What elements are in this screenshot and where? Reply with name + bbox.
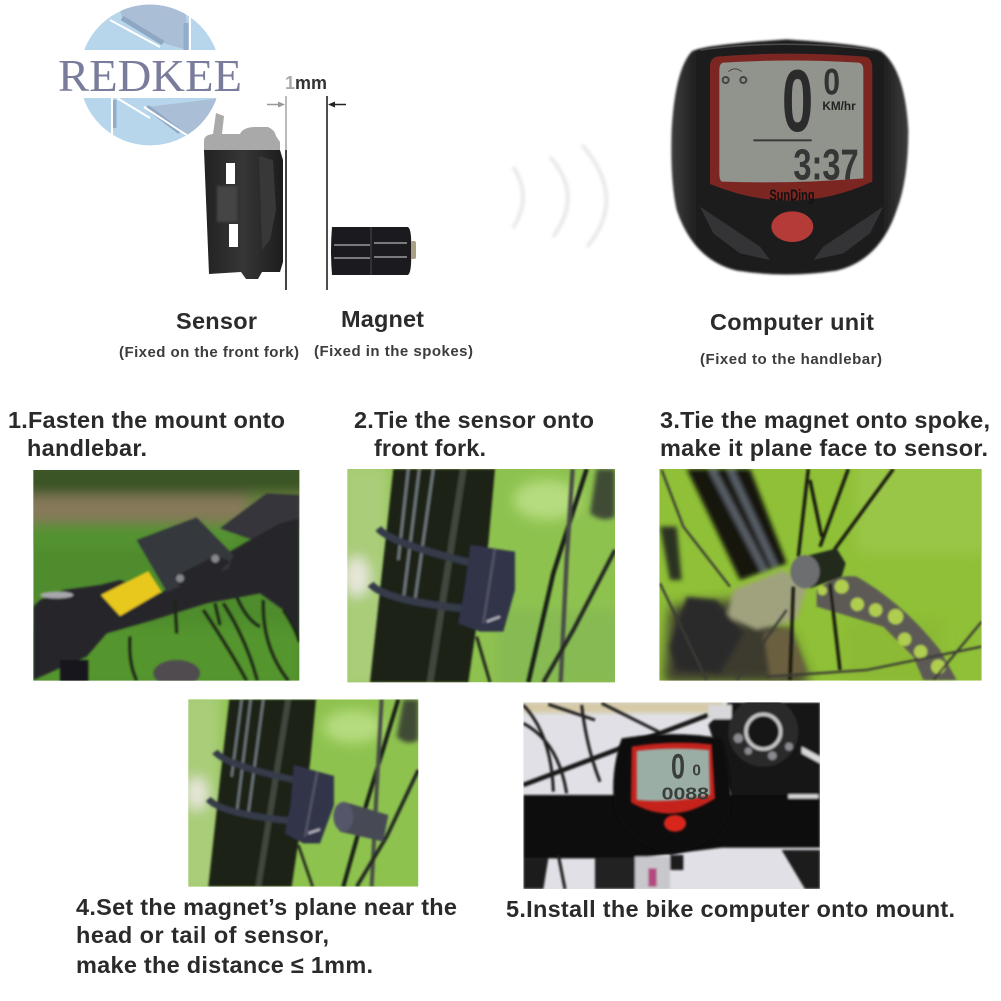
side buttons xyxy=(700,207,770,260)
step 4 heading: 4.Set the magnet’s plane near the xyxy=(76,894,457,920)
computer unit xyxy=(671,39,908,274)
unit body xyxy=(671,39,908,274)
photo: magnet on spoke xyxy=(659,463,987,683)
logo: REDKEE xyxy=(58,0,242,150)
step 2 heading: 2.Tie the sensor onto xyxy=(354,407,594,433)
logo aperture xyxy=(80,4,219,146)
sensor label: Sensor xyxy=(176,308,257,334)
mounted unit red button xyxy=(664,815,686,832)
computer unit placement note: (Fixed to the handlebar) xyxy=(700,351,882,368)
step 1 heading: handlebar. xyxy=(27,435,147,461)
red mode button xyxy=(771,211,813,242)
step 5 heading: 5.Install the bike computer onto mount. xyxy=(506,896,955,922)
step 4 heading: make the distance ≤ 1mm. xyxy=(76,952,373,978)
step 3 heading: 3.Tie the magnet onto spoke, xyxy=(660,407,990,433)
gap label: 1mm: 1mm xyxy=(285,73,327,93)
photo: sensor on fork xyxy=(340,463,620,687)
sensor xyxy=(204,113,283,279)
mounted unit speed readout: 0 xyxy=(671,747,685,786)
photo: computer on mount xyxy=(523,697,820,889)
speed decimal digit: 0 xyxy=(823,63,840,103)
step 4 heading: head or tail of sensor, xyxy=(76,922,329,948)
photo: magnet near sensor xyxy=(180,693,418,893)
speed unit: KM/hr xyxy=(822,99,856,113)
mounted unit bezel xyxy=(631,743,715,814)
step 1 heading: 1.Fasten the mount onto xyxy=(8,407,285,433)
LCD icons xyxy=(723,69,746,83)
mounted unit small digit: 0 xyxy=(692,763,701,780)
LCD screen xyxy=(719,60,863,182)
photo: mount on handlebar xyxy=(33,470,300,681)
logo wordmark: REDKEE xyxy=(58,50,242,101)
magnet xyxy=(331,227,416,275)
brand: SunDing xyxy=(769,187,815,205)
computer unit label: Computer unit xyxy=(710,309,874,335)
mounted unit odometer readout: 0088 xyxy=(662,784,709,804)
mounted unit body xyxy=(613,734,731,854)
magnet placement note: (Fixed in the spokes) xyxy=(314,343,473,360)
speed digit large: 0 xyxy=(782,51,813,150)
red bezel xyxy=(710,54,872,201)
gap guide lines and arrows xyxy=(267,96,346,290)
mounted unit screen xyxy=(637,749,710,801)
step 3 heading: make it plane face to sensor. xyxy=(660,435,988,461)
sensor placement note: (Fixed on the front fork) xyxy=(119,344,299,361)
LCD divider xyxy=(753,139,812,141)
clock readout: 3:37 xyxy=(793,142,859,190)
magnet label: Magnet xyxy=(341,306,424,332)
step 2 heading: front fork. xyxy=(374,435,486,461)
wireless signal arcs xyxy=(513,145,606,247)
